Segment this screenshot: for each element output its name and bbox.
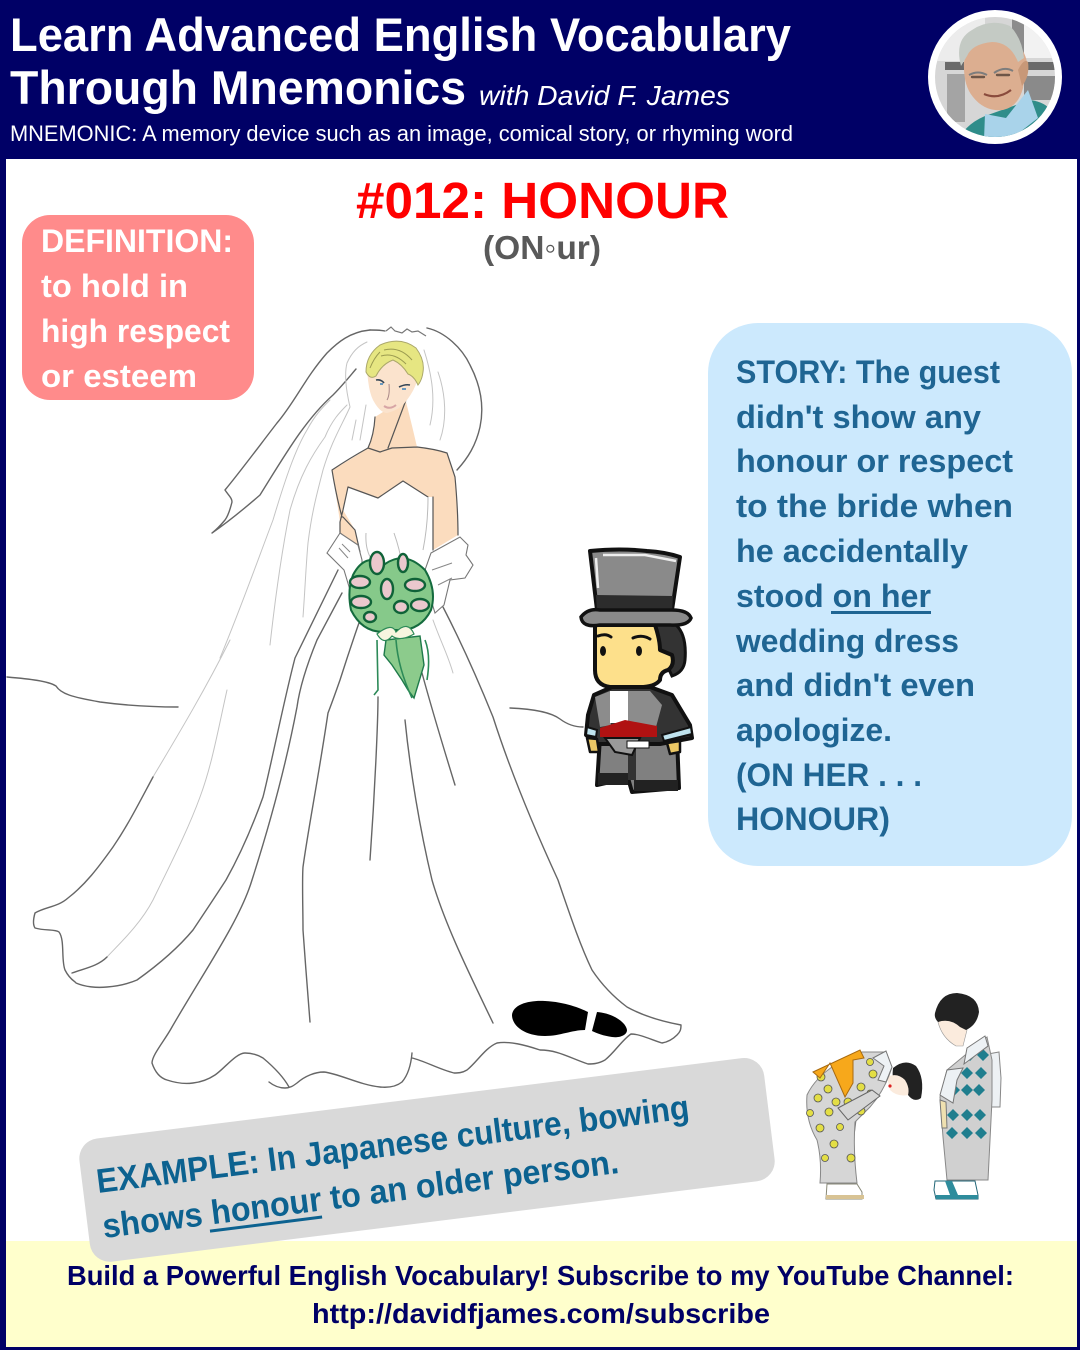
kimono (940, 1037, 992, 1180)
jacket (586, 687, 692, 744)
bouquet (349, 552, 433, 698)
kimono (807, 1052, 892, 1183)
sandals (934, 1181, 978, 1199)
definition box: DEFINITION: (41, 223, 233, 259)
definition box: high respect (41, 313, 230, 349)
icon: presenter portrait (928, 10, 1062, 144)
tulips (350, 552, 429, 622)
shoes (598, 773, 678, 791)
hair (366, 341, 423, 385)
hat band (596, 595, 673, 612)
face (938, 1019, 967, 1046)
story box: he accidentally (736, 533, 968, 569)
veil (34, 328, 482, 987)
illustration: bowing woman (806, 1050, 922, 1199)
hair (935, 993, 979, 1030)
eyes and brows (598, 635, 650, 656)
example box: EXAMPLE: In Japanese culture, bowing (94, 1088, 691, 1201)
icon: footprint on dress (512, 1001, 627, 1037)
legs (597, 737, 679, 792)
definition box: or esteem (41, 358, 197, 394)
lapels (595, 691, 662, 727)
sash (988, 1052, 1001, 1107)
sleeve edge (838, 1090, 880, 1120)
dress skirt (152, 593, 681, 1088)
story box: stood on her (736, 578, 931, 614)
cuffs (586, 727, 692, 741)
header (0, 0, 1080, 159)
hat highlight (596, 555, 676, 588)
ground lines (7, 677, 583, 727)
mnemonic definition: MNEMONIC: A memory device such as an image, comical story, or rhyming word (10, 121, 793, 146)
illustration: groom in top hat (581, 550, 692, 792)
collar (873, 1051, 892, 1082)
arm (848, 1118, 856, 1144)
word heading (356, 172, 729, 266)
example box: shows honour to an older person. (100, 1143, 621, 1246)
bouquet stems (384, 636, 424, 698)
story box: to the bride when (736, 488, 1013, 524)
hair (650, 625, 685, 676)
belt buckle (627, 741, 649, 748)
hand (940, 1100, 947, 1128)
story box: HONOUR) (736, 801, 890, 837)
head (595, 625, 673, 687)
diamond pattern (946, 1049, 989, 1139)
ribbon bow (377, 626, 414, 641)
footer call to action (67, 1260, 1014, 1329)
illustration: bride (7, 327, 681, 1088)
bodice side lines (366, 497, 428, 565)
story box: apologize. (736, 712, 892, 748)
hands (587, 738, 680, 754)
pronunciation: (ON◦ur) (483, 229, 601, 266)
story box: didn't show any (736, 399, 981, 435)
story box: (ON HER . . . (736, 757, 922, 793)
footer band (6, 1241, 1077, 1347)
story box: STORY: The guest (736, 354, 1000, 390)
orange obi (813, 1050, 864, 1097)
title line 1: Learn Advanced English Vocabulary (10, 8, 791, 61)
hair strands (370, 349, 412, 368)
sleeve (940, 1068, 963, 1103)
polka dots (806, 1058, 877, 1162)
feet (826, 1184, 862, 1199)
skin (332, 398, 458, 552)
coat tail (605, 738, 640, 755)
facial features (376, 380, 410, 408)
word heading: #012: HONOUR (356, 172, 729, 229)
illustration: standing woman (934, 993, 1001, 1199)
red sash (600, 720, 657, 737)
arm and collar outlines (332, 400, 458, 552)
trouser shading (628, 745, 636, 780)
story box (708, 323, 1072, 866)
collar (964, 1036, 988, 1064)
story box: and didn't even (736, 667, 975, 703)
footer URL: http://davidfjames.com/subscribe (312, 1298, 770, 1329)
bouquet foliage (349, 558, 433, 632)
definition box: to hold in (41, 268, 188, 304)
head (893, 1062, 922, 1100)
face (887, 1075, 909, 1095)
hat brim (581, 610, 691, 626)
definition box (22, 215, 254, 400)
cheek (888, 1084, 892, 1088)
ribbons (374, 640, 429, 698)
title line 2: Through Mnemonics (10, 61, 466, 114)
gloves (327, 533, 473, 613)
hat crown (590, 550, 680, 610)
shirt (610, 691, 628, 723)
story box: honour or respect (736, 443, 1013, 479)
story box: wedding dress (735, 623, 959, 659)
example box (77, 1056, 777, 1264)
footer call to action: Build a Powerful English Vocabulary! Subscribe to my YouTube Channel: (67, 1260, 1014, 1291)
face (367, 360, 418, 413)
presenter credit: with David F. James (479, 80, 730, 111)
tiara (386, 327, 426, 336)
